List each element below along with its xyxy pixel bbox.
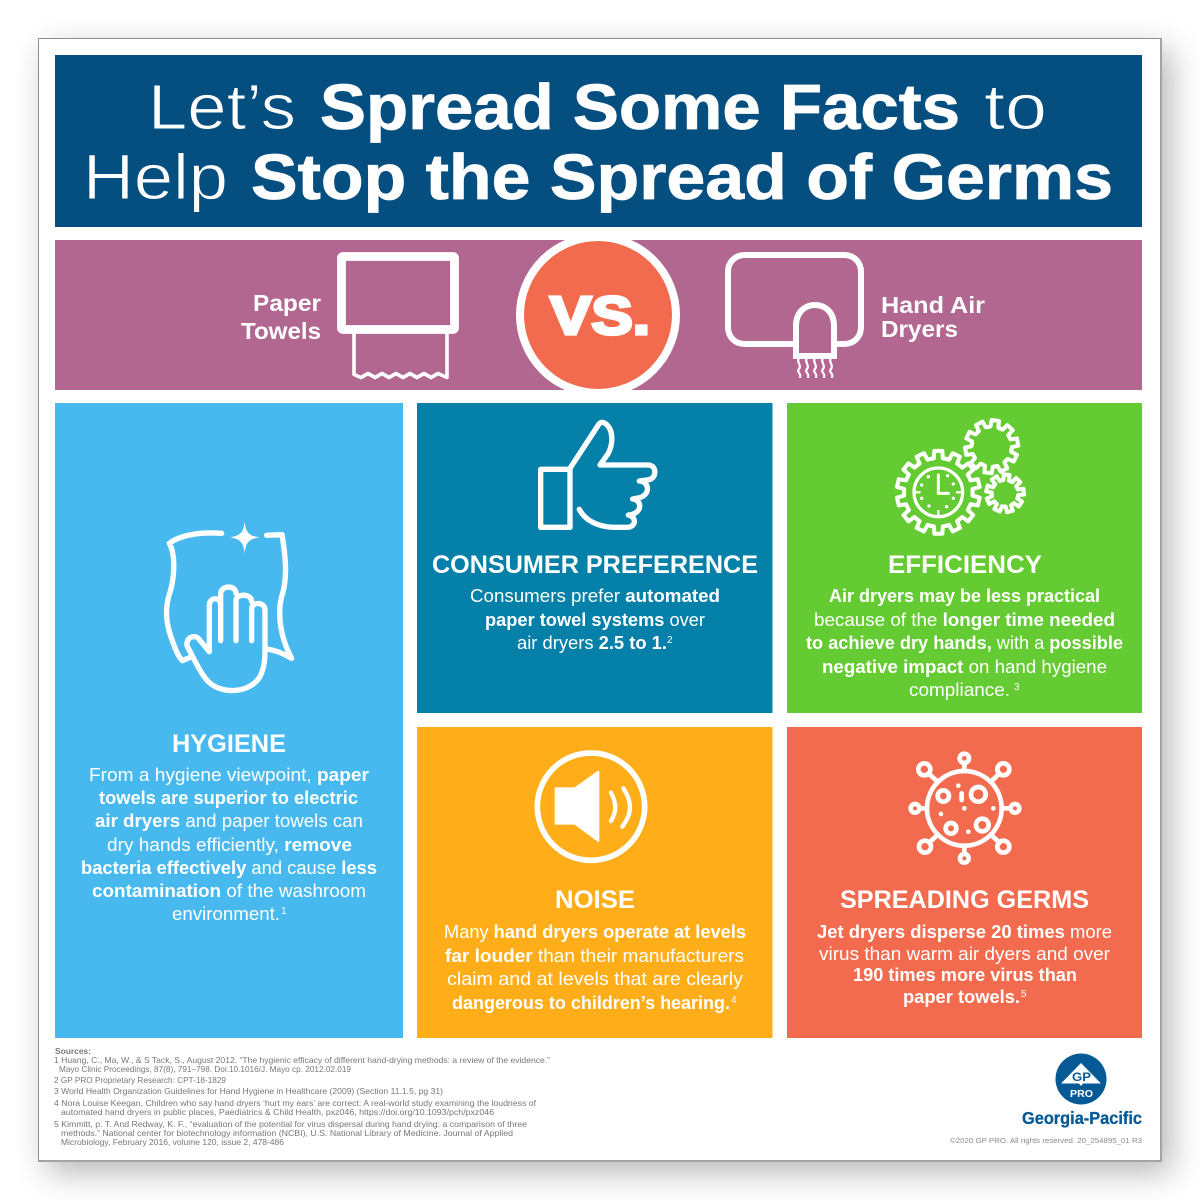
text: efficiency	[806, 585, 1123, 700]
title: to	[984, 71, 1047, 143]
text: hygiene: environment.	[172, 903, 280, 924]
icon: paper towel dispenser	[342, 256, 454, 378]
text: efficiency: compliance.	[909, 679, 1010, 700]
icon: gears with clock	[896, 417, 1026, 534]
label: hand air dryers: Dryers	[881, 316, 958, 342]
label: paper towels: Towels	[241, 318, 321, 344]
vs circle: VS.	[550, 286, 650, 346]
icon: hand air dryer	[728, 255, 861, 377]
text: hygiene: contamination of the washroom	[92, 880, 366, 901]
text: efficiency: 3	[1014, 682, 1020, 693]
sources: 1 Huang, C., Ma, W., & S Tack, S., August 2012. “The hygienic efficacy of different hand-drying methods: a review of the evidence.”	[54, 1056, 550, 1065]
heading: spreading germs: SPREADING GERMS	[840, 886, 1089, 914]
icon: hand wiping with towel	[167, 521, 292, 691]
text: efficiency: because of the longer time needed	[814, 609, 1115, 630]
icon: virus	[911, 754, 1019, 863]
sources: Sources:	[55, 1047, 91, 1056]
text: consumer preference	[470, 585, 720, 653]
label: hand air dryers: Hand Air	[881, 292, 985, 318]
sources: 4 Nora Louise Keegan, Children who say hand dryers ‘hurt my ears’ are correct: A real-world study examining the loudness of	[54, 1099, 537, 1108]
text: efficiency: Air dryers may be less practical	[829, 585, 1100, 606]
panel: efficiency	[787, 403, 1142, 713]
icon: thumbs up	[541, 422, 655, 527]
copyright: ©2020 GP PRO. All rights reserved. 20_254895_01 R3	[950, 1136, 1142, 1145]
text: efficiency: to achieve dry hands, with a possible	[806, 632, 1123, 653]
title: Let’s	[148, 71, 296, 143]
panel: noise	[417, 727, 772, 1038]
text: consumer preference: paper towel systems over	[485, 609, 705, 630]
title: Spread Some Facts	[320, 71, 960, 143]
header panel	[55, 55, 1142, 227]
sources	[54, 1047, 550, 1147]
title: Stop the Spread of Germs	[251, 141, 1113, 213]
panel: hygiene	[55, 403, 403, 1038]
logo: GP PRO Georgia-Pacific	[1022, 1054, 1142, 1128]
text: hygiene: air dryers and paper towels can	[95, 810, 363, 831]
text: consumer preference: 2	[667, 635, 673, 646]
text: hygiene: towels are superior to electric	[99, 787, 358, 808]
text: consumer preference: air dryers 2.5 to 1.	[517, 632, 667, 653]
text: spreading germs: 190 times more virus than	[853, 964, 1077, 985]
sources: 5 Kimmitt, p. T. And Redway, K. F., “evaluation of the potential for virus dispersal during hand drying: a comparison of three	[54, 1120, 527, 1129]
vs circle	[520, 237, 676, 393]
sources: automated hand dryers in public places, Paediatrics & Child Health, pxz046, https://doi.org/10.1093/pch/pxz046	[61, 1108, 494, 1117]
panel: consumer preference	[417, 403, 772, 713]
sources: 2 GP PRO Proprietary Research: CPT-18-1829	[54, 1076, 226, 1085]
text: noise: far louder than their manufacturers	[445, 945, 744, 966]
text: hygiene	[81, 764, 377, 924]
panel: spreading germs	[787, 727, 1142, 1038]
text: efficiency: negative impact on hand hygiene	[822, 656, 1107, 677]
text: spreading germs: virus than warm air dyers and over	[819, 943, 1110, 964]
title	[83, 71, 1113, 213]
text: noise: dangerous to children’s hearing.	[452, 992, 730, 1013]
heading: hygiene: HYGIENE	[172, 730, 286, 758]
sources: Mayo Clinic Proceedings, 87(8), 791–798. Doi:10.1016/J. Mayo cp. 2012.02.019	[59, 1065, 351, 1074]
logo: GP PRO Georgia-Pacific: GP	[1072, 1072, 1091, 1084]
text: hygiene: dry hands efficiently, remove	[107, 834, 352, 855]
sources: 3 World Health Organization Guidelines for Hand Hygiene in Healthcare (2009) (Section 11.1.5, pg 31)	[54, 1087, 443, 1096]
heading: efficiency: EFFICIENCY	[888, 551, 1042, 579]
text: noise: claim and at levels that are clearly	[447, 968, 744, 989]
label: hand air dryers	[881, 292, 985, 342]
text: noise: 4	[731, 995, 737, 1006]
sources: Microbiology, February 2016, volume 120, issue 2, 478-486	[61, 1138, 284, 1147]
title: Help	[83, 141, 228, 213]
text: spreading germs: paper towels.	[903, 986, 1020, 1007]
sources: methods.” National center for biotechnology information (NCBI), U.S. National Library of Medicine. Journal of Applied	[61, 1129, 513, 1138]
text: consumer preference: Consumers prefer automated	[470, 585, 720, 606]
text: hygiene: From a hygiene viewpoint, paper	[89, 764, 369, 785]
heading: noise: NOISE	[555, 886, 635, 914]
text: noise: Many hand dryers operate at levels	[444, 921, 746, 942]
text: noise	[444, 921, 746, 1013]
text: spreading germs	[817, 921, 1112, 1007]
text: hygiene: bacteria effectively and cause less	[81, 857, 377, 878]
comparison banner	[55, 237, 1142, 393]
label: paper towels	[241, 290, 321, 344]
label: paper towels: Paper	[253, 290, 321, 316]
logo: GP PRO Georgia-Pacific: Georgia-Pacific	[1022, 1108, 1142, 1128]
text: spreading germs: 5	[1021, 989, 1027, 1000]
text: spreading germs: Jet dryers disperse 20 times more	[817, 921, 1112, 942]
heading: consumer preference: CONSUMER PREFERENCE	[432, 551, 758, 579]
icon: speaker	[537, 753, 645, 860]
text: hygiene: 1	[281, 906, 287, 917]
logo: GP PRO Georgia-Pacific: PRO	[1070, 1088, 1093, 1100]
